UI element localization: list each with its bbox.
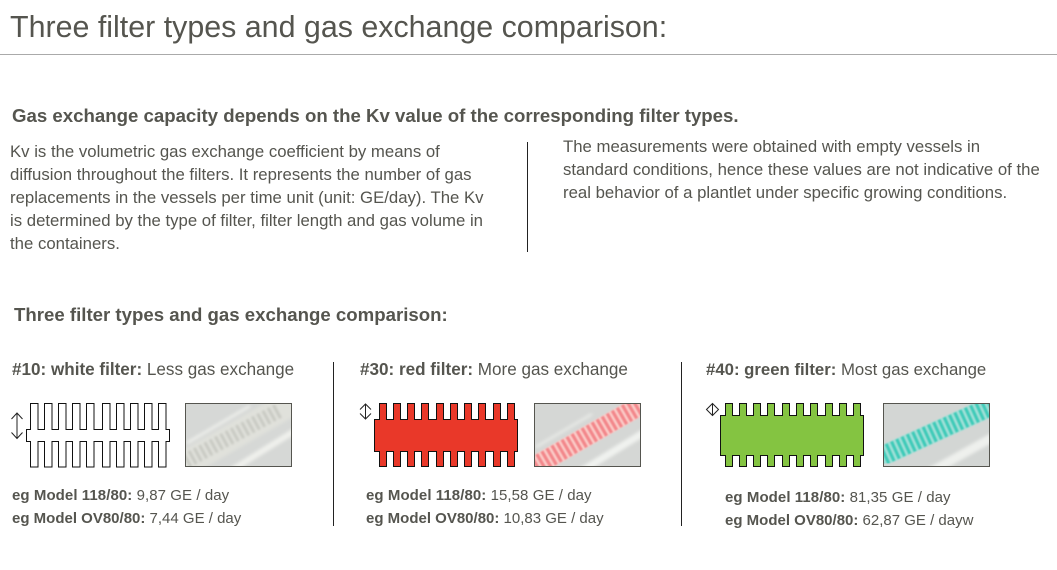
red filter values xyxy=(366,487,604,527)
text block: Kv definition: Kv is the volumetric gas exchange coefficient by means of xyxy=(10,142,440,161)
comparison heading: Three filter types and gas exchange comparison: xyxy=(14,304,448,325)
title: Three filter types and gas exchange comparison: xyxy=(10,10,667,44)
icon: white filter gap arrow xyxy=(12,413,22,438)
photo: red filter xyxy=(534,403,641,467)
red filter values: eg Model OV80/80: 10,83 GE / day xyxy=(366,510,604,527)
text block: Kv definition: replacements in the vessels per time unit (unit: GE/day). The Kv xyxy=(10,188,484,207)
icon: white filter profile xyxy=(26,404,170,467)
green filter heading: #40: green filter: Most gas exchange xyxy=(706,360,986,379)
text block: measurement conditions: real behavior of a plantlet under specific growing conditions. xyxy=(563,183,1007,202)
text block: measurement conditions: The measurements were obtained with empty vessels in xyxy=(563,137,980,156)
green filter values: eg Model 118/80: 81,35 GE / day xyxy=(725,489,951,506)
intro heading: Gas exchange capacity depends on the Kv value of the corresponding filter types. xyxy=(12,105,739,126)
text block: measurement conditions xyxy=(563,137,1040,202)
red filter heading: #30: red filter: More gas exchange xyxy=(360,360,628,379)
white filter values: eg Model 118/80: 9,87 GE / day xyxy=(12,487,229,504)
text block: Kv definition xyxy=(10,142,484,253)
photo: white filter xyxy=(185,403,292,467)
green filter values xyxy=(725,489,974,529)
icon: green filter profile xyxy=(720,404,864,466)
text block: Kv definition: the containers. xyxy=(10,234,120,253)
icon: green filter gap arrow xyxy=(706,404,718,416)
text block: measurement conditions: standard conditions, hence these values are not indicative of the xyxy=(563,160,1040,179)
text block: Kv definition: is determined by the type of filter, filter length and gas volume in xyxy=(10,211,483,230)
icon: red filter profile xyxy=(374,404,518,466)
green filter values: eg Model OV80/80: 62,87 GE / dayw xyxy=(725,512,973,529)
red filter values: eg Model 118/80: 15,58 GE / day xyxy=(366,487,592,504)
white filter values xyxy=(12,487,242,527)
white filter heading: #10: white filter: Less gas exchange xyxy=(12,360,294,379)
text block: Kv definition: diffusion throughout the filters. It represents the number of gas xyxy=(10,165,472,184)
white filter values: eg Model OV80/80: 7,44 GE / day xyxy=(12,510,241,527)
photo: green filter xyxy=(883,403,990,467)
icon: red filter gap arrow xyxy=(360,404,371,419)
